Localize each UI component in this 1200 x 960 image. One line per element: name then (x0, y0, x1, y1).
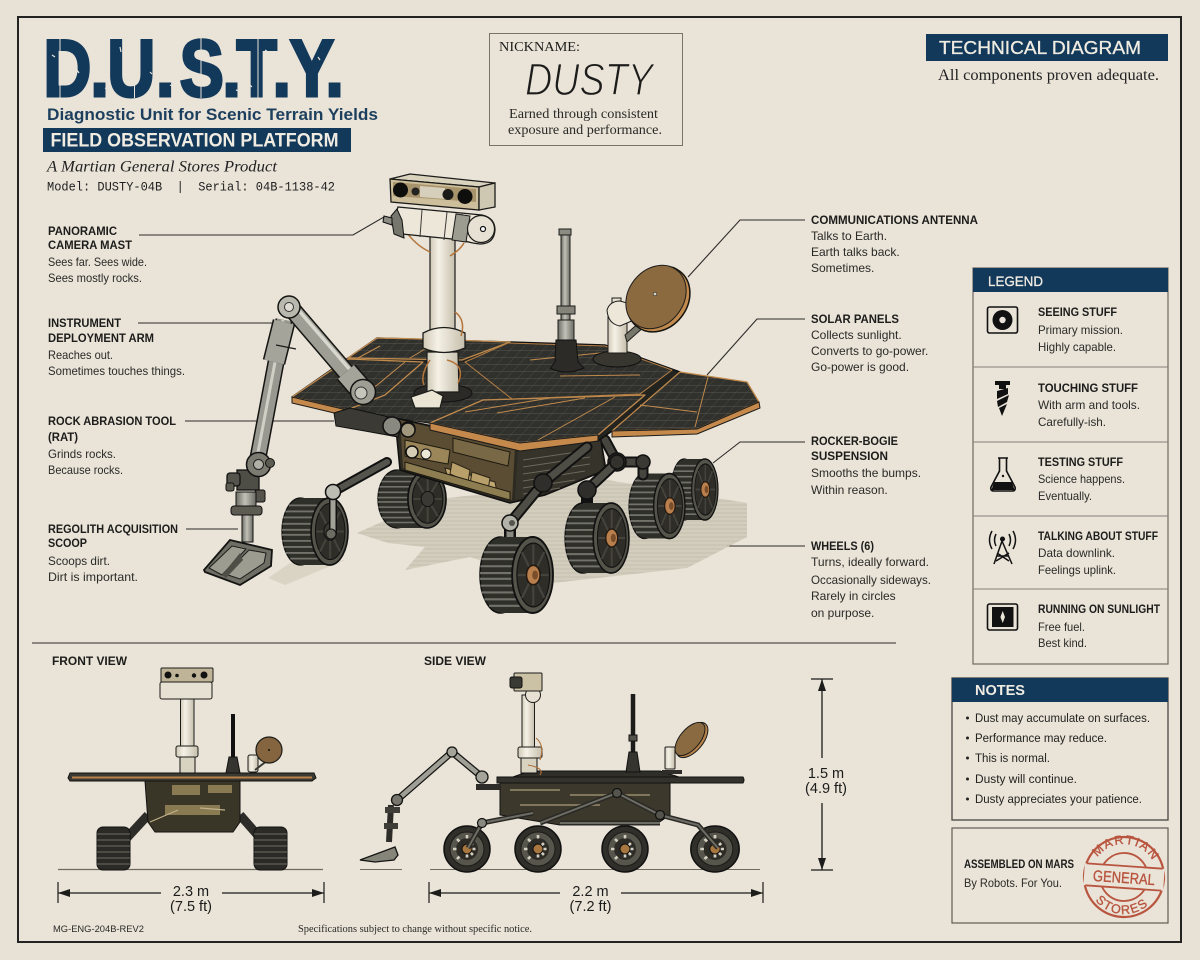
panel: rear center (465, 343, 672, 399)
mast base (414, 384, 472, 402)
main rover illustration (204, 174, 760, 613)
callout: wheels (811, 541, 931, 620)
callout: solar panels: SOLAR PANELS (811, 314, 899, 326)
ground line (360, 868, 760, 870)
side length dimension: (7.2 ft) (570, 899, 611, 915)
callout: wheels: on purpose. (811, 606, 874, 620)
icon: solar panel box (988, 604, 1018, 630)
nickname caption: Earned through consistent (509, 107, 658, 122)
front width dimension (58, 882, 324, 915)
elbow joint (278, 296, 300, 318)
callout: regolith acquisition scoop (48, 524, 178, 584)
rocker-bogie near links (502, 447, 624, 540)
legend item: seeing stuff: SEEING STUFF (1038, 307, 1117, 319)
side length dimension (429, 882, 763, 915)
subtitle: Diagnostic Unit for Scenic Terrain Yields (47, 105, 378, 124)
callout: panoramic camera mast: Sees far. Sees wide. (48, 255, 147, 269)
legend item: running on sunlight (988, 604, 1160, 650)
icon: flask (991, 458, 1015, 491)
upper arm (291, 308, 363, 392)
banner: technical diagram (926, 34, 1168, 84)
title: D.U.S.T.Y. (43, 23, 344, 113)
callout: wheels: Rarely in circles (811, 589, 896, 603)
callout: panoramic camera mast: PANORAMIC (48, 226, 117, 238)
panel seams (358, 340, 708, 440)
callout: solar panels: Go-power is good. (811, 360, 909, 374)
callout: rocker-bogie suspension: Within reason. (811, 483, 888, 497)
side length dimension: 2.2 m (572, 884, 609, 900)
callout: instrument deployment arm: Sometimes touches things. (48, 364, 185, 378)
height dimension (805, 679, 847, 870)
banner: technical diagram: TECHNICAL DIAGRAM (939, 37, 1141, 58)
notes header: NOTES (975, 683, 1025, 699)
legend item: testing stuff: Eventually. (1038, 489, 1092, 503)
legend item: touching stuff (995, 381, 1140, 429)
legend item: testing stuff: Science happens. (1038, 472, 1125, 486)
callout: wheels: Occasionally sideways. (811, 573, 931, 587)
legend item: talking about stuff: Data downlink. (1038, 546, 1115, 560)
nickname handwriting: DUSTY (525, 54, 656, 105)
chassis (395, 418, 606, 503)
panel: right wing (612, 372, 759, 431)
chassis (500, 783, 670, 825)
panel: front left (292, 359, 423, 410)
panel: nickname (490, 34, 682, 146)
callout: communications antenna (811, 215, 978, 275)
front view heading: FRONT VIEW (52, 656, 127, 668)
side view rover (360, 673, 760, 872)
section divider (32, 642, 896, 644)
stamp: martian general stores: MARTIAN (1092, 835, 1159, 860)
base deck (292, 338, 680, 443)
deck (510, 771, 682, 778)
callout: rocker-bogie suspension: ROCKER-BOGIE (811, 436, 898, 448)
wheels (444, 826, 739, 872)
callout: regolith acquisition scoop: SCOOP (48, 538, 87, 550)
panel: legend (973, 268, 1168, 664)
callouts: left column (48, 226, 185, 584)
rock abrasion tool housing (334, 408, 415, 437)
ground line (58, 868, 323, 870)
callout: rock abrasion tool: Grinds rocks. (48, 447, 116, 461)
panel: notes (952, 678, 1168, 820)
front width dimension: (7.5 ft) (170, 899, 212, 915)
side dish (662, 717, 714, 772)
callout: panoramic camera mast (48, 226, 147, 285)
camera head (390, 174, 495, 210)
icon: drill bit (995, 381, 1010, 416)
callout: rock abrasion tool (48, 416, 176, 477)
legend item: talking about stuff: TALKING ABOUT STUFF (1038, 531, 1158, 543)
small block (411, 390, 443, 408)
nickname caption: exposure and performance. (508, 123, 662, 138)
legend item: seeing stuff: Primary mission. (1038, 323, 1123, 337)
notes list (966, 711, 1150, 806)
leader lines (138, 217, 805, 546)
front view rover (58, 668, 323, 870)
callout: communications antenna: Talks to Earth. (811, 229, 887, 243)
lower arm (257, 320, 284, 463)
panel: front view (52, 656, 324, 915)
icon: camera eye (988, 307, 1018, 333)
scoop pillar (242, 515, 253, 542)
legend item: testing stuff: TESTING STUFF (1038, 457, 1123, 469)
callout: instrument deployment arm: DEPLOYMENT ARM (48, 333, 154, 345)
dish (248, 755, 258, 772)
icon: radio tower (990, 531, 1016, 564)
head cylinder (396, 207, 495, 244)
callout: panoramic camera mast: CAMERA MAST (48, 240, 132, 252)
footer: document code: MG-ENG-204B-REV2 (53, 924, 144, 935)
legend item: running on sunlight: RUNNING ON SUNLIGHT (1038, 604, 1160, 616)
high gain antenna mast (550, 229, 584, 372)
front width dimension: 2.3 m (173, 884, 209, 900)
legend header (973, 268, 1168, 292)
panel: side view (360, 656, 847, 915)
deck edge rims (430, 423, 598, 451)
front wheels (282, 484, 629, 613)
wheels (97, 827, 287, 870)
tagline: A Martian General Stores Product (46, 158, 278, 176)
side antenna base (626, 752, 640, 772)
height dimension: (4.9 ft) (805, 781, 847, 797)
legend item: touching stuff: With arm and tools. (1038, 398, 1140, 412)
legend item: seeing stuff: Highly capable. (1038, 340, 1116, 354)
rear wheels (378, 459, 718, 538)
rocker-bogie rear links (605, 440, 650, 475)
callout: communications antenna: Earth talks back. (811, 245, 900, 259)
callout: rock abrasion tool: ROCK ABRASION TOOL (48, 416, 176, 428)
callout: instrument deployment arm: Reaches out. (48, 348, 113, 362)
legend item: testing stuff (991, 457, 1125, 503)
legend header: LEGEND (988, 273, 1043, 289)
callout: regolith acquisition scoop: Dirt is important. (48, 570, 138, 584)
side mast (510, 673, 542, 775)
mast (180, 757, 195, 773)
callout: rocker-bogie suspension: SUSPENSION (811, 451, 888, 463)
callout: wheels: WHEELS (6) (811, 541, 874, 553)
notes list: This is normal. (975, 751, 1050, 765)
assembled caption: By Robots. For You. (964, 876, 1062, 890)
panel: center under mast (347, 362, 512, 423)
shoulder joint (350, 380, 376, 404)
legend item: talking about stuff (990, 531, 1158, 577)
legend item: talking about stuff: Feelings uplink. (1038, 563, 1116, 577)
callout: solar panels: Collects sunlight. (811, 328, 902, 342)
header block (43, 23, 378, 195)
nickname label: NICKNAME: (499, 39, 580, 54)
wrist cluster (226, 452, 274, 515)
model and serial: Model: DUSTY-04B | Serial: 04B-1138-42 (47, 180, 335, 194)
stamp: martian general stores: STORES (1096, 896, 1147, 914)
mast collar (423, 328, 465, 352)
instrument deployment arm (256, 296, 376, 463)
callout: rock abrasion tool: (RAT) (48, 432, 78, 444)
assembled heading: ASSEMBLED ON MARS (964, 859, 1074, 871)
callout: rock abrasion tool: Because rocks. (48, 463, 123, 477)
shadow under front wheel (268, 560, 345, 585)
side arm (360, 747, 500, 862)
stamp: martian general stores: GENERAL (1092, 868, 1156, 889)
callout: communications antenna: COMMUNICATIONS ANTENNA (811, 215, 978, 227)
notes list: Dust may accumulate on surfaces. (975, 711, 1150, 725)
callout: instrument deployment arm: INSTRUMENT (48, 318, 121, 330)
legend item: seeing stuff (988, 307, 1123, 354)
deck panels (292, 338, 760, 451)
side view heading: SIDE VIEW (424, 656, 486, 668)
mast cables (405, 230, 464, 385)
callout: solar panels (811, 314, 928, 374)
height dimension: 1.5 m (808, 766, 844, 782)
callout: panoramic camera mast: Sees mostly rocks. (48, 271, 142, 285)
callouts: right column (811, 215, 978, 620)
panel: assembled on mars (951, 827, 1169, 924)
suspension (125, 815, 262, 840)
mast lower section (427, 352, 459, 392)
legend item: touching stuff: TOUCHING STUFF (1038, 383, 1138, 395)
body (145, 781, 240, 832)
banner: field observation platform: FIELD OBSERVATION PLATFORM (50, 130, 338, 152)
notes list: Dusty appreciates your patience. (975, 792, 1142, 806)
callout: regolith acquisition scoop: REGOLITH ACQUISITION (48, 524, 178, 536)
deck (68, 773, 316, 781)
rocker-bogie left links (333, 462, 387, 492)
legend item: touching stuff: Carefully-ish. (1038, 415, 1106, 429)
mast tube (430, 233, 455, 330)
callout: regolith acquisition scoop: Scoops dirt. (48, 554, 110, 568)
notes list: Dusty will continue. (975, 772, 1077, 786)
stamp: martian general stores (1082, 835, 1166, 918)
ground shadow (357, 480, 747, 583)
legend item: running on sunlight: Free fuel. (1038, 620, 1085, 634)
callout: rocker-bogie suspension: Smooths the bumps. (811, 466, 921, 480)
communications antenna dish (593, 253, 703, 367)
regolith acquisition scoop (204, 452, 274, 585)
callout: instrument deployment arm (48, 318, 185, 378)
notes header (952, 678, 1168, 702)
legend item: running on sunlight: Best kind. (1038, 636, 1087, 650)
rocker bogie (468, 788, 718, 848)
panel: rear left (348, 338, 510, 360)
callout: communications antenna: Sometimes. (811, 261, 874, 275)
callout: solar panels: Converts to go-power. (811, 344, 928, 358)
side antenna (626, 694, 640, 772)
panoramic camera mast (383, 174, 495, 408)
antenna (231, 714, 235, 765)
footer: disclaimer: Specifications subject to change without specific notice. (298, 924, 532, 935)
callout: wheels: Turns, ideally forward. (811, 555, 929, 569)
panel: front center (430, 395, 645, 443)
nickname caption (508, 107, 662, 138)
mast head (160, 682, 212, 699)
scoop bucket (204, 540, 272, 585)
notes list: Performance may reduce. (975, 731, 1107, 745)
technical diagram tagline: All components proven adequate. (938, 67, 1159, 84)
callout: rocker-bogie suspension (811, 436, 921, 497)
